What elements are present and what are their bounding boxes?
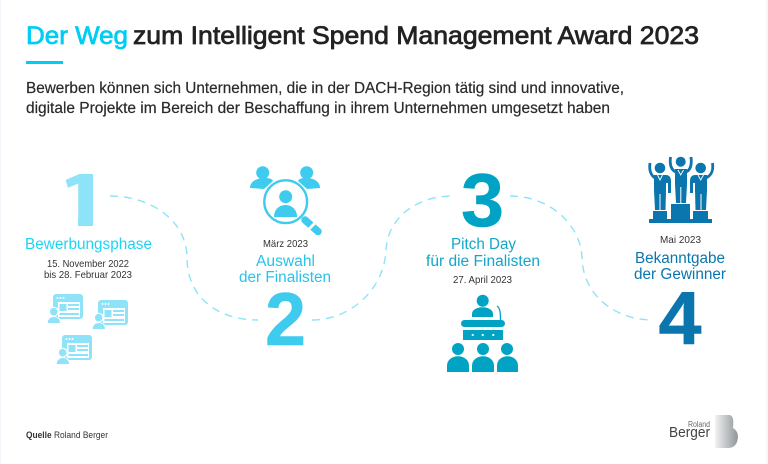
step 1 dates — [44, 258, 132, 281]
step 2 heading — [239, 253, 331, 286]
number 3: 3 — [461, 158, 504, 242]
step 2 — [239, 166, 331, 361]
left figure — [654, 175, 671, 210]
icon: speaker at lectern with audience — [447, 295, 518, 372]
step 3 heading: für die Finalisten — [426, 253, 540, 270]
step 2 date: März 2023 — [263, 238, 308, 250]
logo: Roland Berger: Roland — [688, 420, 710, 429]
step 1 dates: bis 28. Februar 2023 — [44, 269, 132, 281]
source note: Quelle Roland Berger — [26, 430, 108, 440]
title: zum Intelligent Spend Management Award 2023 — [133, 22, 699, 50]
step 4 heading — [634, 250, 726, 283]
number 4: 4 — [658, 276, 702, 360]
icon: magnifier over candidates — [250, 166, 320, 232]
step 3 heading: Pitch Day — [451, 236, 516, 253]
step 1 heading: Bewerbungsphase — [25, 236, 152, 253]
step 1 — [25, 158, 152, 364]
step 4 heading: Bekanntgabe — [635, 250, 725, 267]
logo: Roland Berger: Berger — [669, 425, 710, 441]
title underline — [26, 61, 63, 64]
number 2: 2 — [265, 277, 306, 361]
dashed connector path — [110, 196, 653, 320]
intro text: digitale Projekte im Bereich der Beschaffung in ihrem Unternehmen umgesetzt haben — [26, 100, 610, 117]
step 3 heading — [426, 236, 540, 270]
step 2 heading: der Finalisten — [239, 269, 331, 286]
step 3 — [426, 158, 540, 372]
step 4 date: Mai 2023 — [660, 234, 701, 246]
step 3 date: 27. April 2023 — [453, 274, 512, 286]
logo: Roland Berger — [669, 415, 738, 448]
step 2 heading: Auswahl — [256, 253, 315, 270]
centre figure — [675, 169, 687, 203]
icon: applicants with browser windows — [46, 294, 128, 364]
step 4 heading: der Gewinner — [634, 266, 726, 283]
step 1 dates: 15. November 2022 — [47, 258, 129, 270]
intro text: Bewerben können sich Unternehmen, die in der DACH-Region tätig sind und innovative, — [26, 80, 624, 97]
title: Der Weg — [26, 22, 128, 50]
step 4 — [634, 157, 726, 360]
intro text — [26, 80, 624, 117]
right figure — [690, 175, 707, 210]
number 1: 1 — [53, 158, 115, 242]
icon: winners on podium — [649, 157, 713, 223]
